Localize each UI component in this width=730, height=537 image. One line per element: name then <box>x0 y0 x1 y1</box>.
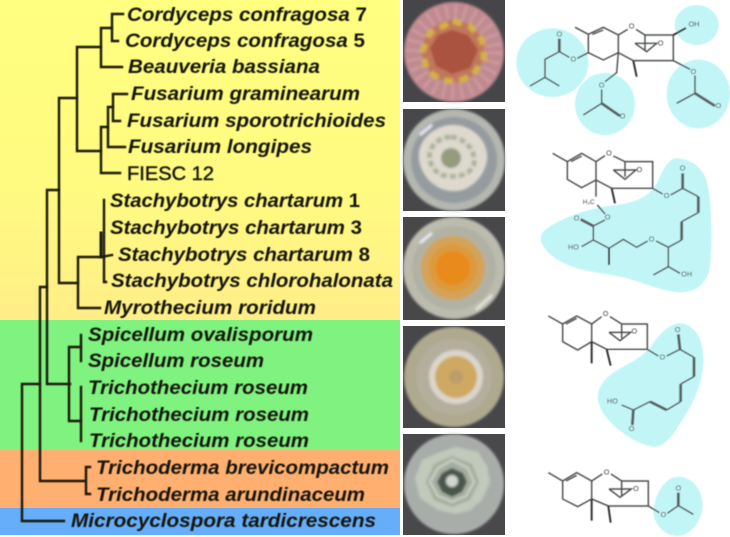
culture plate 2: white colony on grey agar <box>403 109 505 211</box>
species labels <box>71 5 393 532</box>
molecular skeleton: HO <box>568 242 579 251</box>
molecular skeleton: O <box>570 54 576 63</box>
species labels: Beauveria bassiana <box>128 57 320 78</box>
species labels: Cordyceps confragosa 7 <box>127 5 367 26</box>
molecular skeleton: O <box>631 327 637 336</box>
molecular skeleton: O <box>715 101 721 110</box>
molecular skeleton: O <box>649 234 655 243</box>
molecular skeleton: O <box>574 213 580 222</box>
molecular skeleton: O <box>605 212 611 221</box>
species labels: Trichoderma brevicompactum <box>96 458 389 479</box>
panel: yellow clade background <box>0 0 400 320</box>
species labels: Stachybotrys chartarum 1 <box>110 191 360 212</box>
molecular skeleton <box>553 148 698 278</box>
species labels: Trichothecium roseum <box>89 405 309 426</box>
molecular skeleton <box>530 20 721 121</box>
molecular skeleton: OH <box>681 269 692 278</box>
molecular skeleton: O <box>606 148 612 157</box>
species labels: Fusarium graminearum <box>131 84 360 105</box>
species labels: Fusarium longipes <box>128 137 312 158</box>
culture plate 3: orange colony <box>403 217 505 320</box>
culture plate 5: grey-green colony with dark center <box>403 434 505 535</box>
molecular skeleton: O <box>620 112 626 121</box>
molecular skeleton: O <box>636 165 642 174</box>
molecular skeleton <box>548 467 693 523</box>
molecular skeleton: OH <box>688 20 699 29</box>
molecular skeleton: O <box>658 38 664 47</box>
culture plate 4: tan colony with white ring <box>403 326 505 428</box>
structure 3: trichothecene with polyene acid chain <box>548 309 703 447</box>
molecular skeleton: O <box>556 30 562 39</box>
species labels: Trichothecium roseum <box>88 378 308 399</box>
species labels: Cordyceps confragosa 5 <box>125 31 365 52</box>
species labels: Trichothecium roseum <box>89 431 309 452</box>
species labels: Stachybotrys chartarum 8 <box>118 245 370 266</box>
species labels: Fusarium sporotrichioides <box>127 111 386 132</box>
species labels: FIESC 12 <box>127 164 214 185</box>
species labels: Trichoderma arundinaceum <box>96 485 365 506</box>
molecular skeleton: O <box>629 22 635 31</box>
panel: blue clade background <box>0 508 400 535</box>
molecular skeleton: O <box>633 484 639 493</box>
species labels: Spicellum ovalisporum <box>88 325 313 346</box>
structure 1: four-substituent trichothecene <box>516 5 730 135</box>
molecular skeleton: O <box>690 67 696 76</box>
structure 2: macrocyclic trichothecene <box>541 148 711 292</box>
molecular skeleton: O <box>664 191 670 200</box>
molecular skeleton: H₃C <box>583 199 595 206</box>
species labels: Stachybotrys chlorohalonata <box>111 271 393 292</box>
phylogenetic tree <box>22 14 127 521</box>
highlight: ester groups <box>516 5 730 135</box>
species labels: Stachybotrys chartarum 3 <box>110 218 362 239</box>
molecular skeleton: O <box>675 325 681 334</box>
molecular skeleton: O <box>604 467 610 476</box>
species labels: Myrothecium roridum <box>104 298 316 319</box>
molecular skeleton: O <box>660 510 666 519</box>
structure 4: trichothecene with acetyl group <box>548 467 703 536</box>
species labels: Spicellum roseum <box>88 351 264 372</box>
molecular skeleton: O <box>629 424 635 433</box>
panel: orange clade background <box>0 450 400 508</box>
molecular skeleton: O <box>599 80 605 89</box>
molecular skeleton: O <box>675 483 681 492</box>
molecular skeleton <box>548 309 694 433</box>
culture plate 1: red and yellow <box>403 0 505 102</box>
species labels: Microcyclospora tardicrescens <box>71 511 376 532</box>
highlight: acetyl group <box>653 477 703 536</box>
molecular skeleton: O <box>659 352 665 361</box>
panel: green clade background <box>0 320 400 450</box>
molecular skeleton: O <box>680 163 686 172</box>
molecular skeleton: HO <box>607 397 618 406</box>
highlight: macrocyclic ring <box>541 158 711 292</box>
highlight: polyene chain <box>598 323 703 447</box>
molecular skeleton: O <box>603 309 609 318</box>
